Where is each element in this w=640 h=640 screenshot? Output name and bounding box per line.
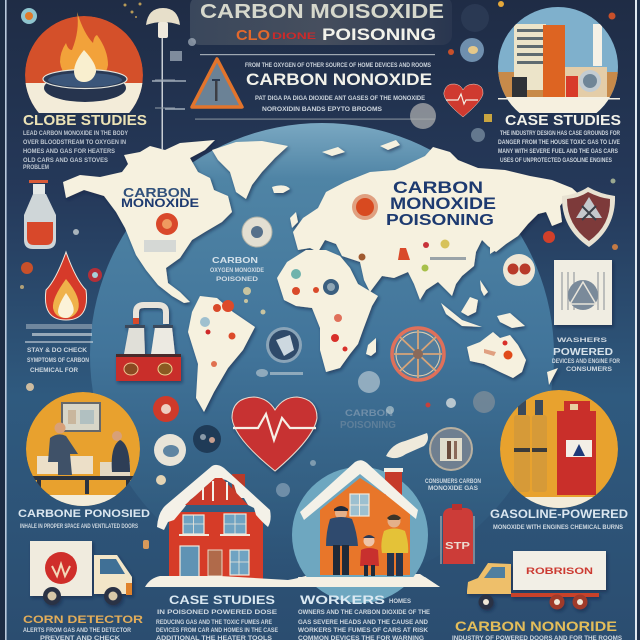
map label: carbon monoxide poisoning right: CARBON [393,178,483,197]
icon: box truck [467,551,606,610]
paragraph: LEAD CARBON MONOXIDE IN THE BODY [23,130,129,137]
icon: factory [116,305,181,381]
house walls [169,512,263,580]
world map [63,140,583,412]
lamp probe [146,8,180,150]
Eurasia [293,147,583,300]
icon: delivery truck [30,541,132,605]
icon: small top-left badge [21,8,37,24]
text block: powered: POWERED [553,346,613,358]
text block: left stripes: SYMPTOMS OF CARBON [27,357,89,364]
title line 2: CLO [236,27,270,44]
map label: center: CARBON [212,256,258,265]
faded circles and label in map [340,371,495,431]
icon: gas cans [500,390,618,512]
subtitle panel: NOROXIDIN BANDS EPYTO BROOMS [262,106,383,113]
Indonesia and Philippines [441,280,525,328]
text block: powered: WASHERS [557,337,608,344]
father [326,506,358,575]
heading: WORKERS [300,593,385,607]
icon: gold and gray dots [471,114,492,142]
paragraph: OVER BLOODSTREAM TO OXYGEN IN [23,139,126,146]
South America [188,296,255,412]
paragraph: WORKERS THE FUMES OF CARS AT RISK [298,627,428,634]
icon: red bottle [24,180,56,249]
map markers [144,194,512,367]
icon: globe medallion [266,327,302,363]
panel: red house [145,465,440,587]
map label: carbon monoxide left: CARBON [123,185,191,200]
icon: compass badge [242,217,272,247]
heading: corn detector: CORN DETECTOR [23,614,143,626]
Australia [467,332,526,378]
text block: medallion caption: CONSUMERS CARBON [425,478,481,485]
panel: carbon poisoned [18,392,150,530]
panel: corn detector [23,541,143,640]
caption: INHALE IN PROPER SPACE AND VENTILATED DOORS [20,523,138,530]
icon: grey texture dot [410,103,436,129]
icon: left small markers [20,229,102,391]
icon: gas cylinder [441,504,474,564]
text block: medallion caption [425,478,481,492]
map label: center: POISONED [216,276,258,283]
caption: MONOXIDE WITH ENGINES CHEMICAL BURNS [493,524,624,531]
icon: sparks top [124,2,142,18]
icon: small star markers [243,287,266,314]
British Isles [290,212,298,228]
paragraph: PROBLEM [23,164,49,171]
faded circles and label in map: POISONING [340,420,396,431]
panel: globe studies [23,12,147,171]
paragraph [298,609,431,640]
mother [381,514,408,576]
child [360,535,379,576]
panel: carbon nonoride [452,551,623,640]
heading: carbone ponosied: CARBONE PONOSIED [18,508,150,520]
icon: mask disk [503,254,535,286]
paragraph: OLD CARS AND GAS STOVES [23,157,109,164]
icon: small gauges centre-left [152,38,196,110]
North America [63,140,232,303]
icon: red badge [153,396,179,422]
icon: buildings in circle [498,7,618,113]
paragraph: HOMES AND GAS FOR HEATERS [23,148,116,155]
paragraph [23,627,131,640]
text block: powered: DEVICES AND ENGINE FOR [552,358,620,365]
title line 2: POISONING [322,25,436,44]
icon: right red splat [543,178,618,250]
ground line [498,98,620,100]
panel: orange house with family [292,460,440,603]
paragraph: OWNERS AND THE CARBON DIOXIDE OF THE [298,609,431,616]
icon: medical badges [154,425,316,497]
Iceland and Arctic isles [272,140,404,193]
chimney [232,474,245,498]
map label: center [210,256,265,283]
subtitle panel: FROM THE OXYGEN OF OTHER SOURCE OF HOME DEVICES AND ROOMS [245,62,432,69]
icon: heart [444,84,483,117]
panel: workers [298,593,431,640]
panel: case studies bottom [156,593,279,640]
icon: faded pill [256,369,303,377]
Africa [277,250,378,372]
chimney [384,468,403,495]
heading: carbon nonoride: CARBON NONORIDE [455,618,617,634]
subtitle heading: CARBON NONOXIDE [246,70,432,89]
globe [90,123,554,587]
heading: CASE STUDIES [169,593,275,607]
title line 2 [236,25,436,44]
snowy roof [157,465,271,530]
Greenland [212,141,288,199]
paragraph: DEVICES FROM CAR AND HOMES IN THE CASE [156,627,279,634]
icon: box truck: ROBRISON [526,566,593,577]
icon: moon planet [448,1,616,62]
panel: gasoline-powered [490,390,628,531]
paragraph [156,609,279,640]
caption tag: HOMES [389,598,412,605]
icon: shield [562,187,615,247]
paragraph: GAS SEVERE HEADS AND THE CAUSE AND [298,619,428,626]
backdrop circle [292,467,428,603]
icon: framed medallion [430,428,472,470]
title line 2: DIONE [272,31,316,41]
icon: smoke cloud [386,433,428,458]
map label: center: OXYGEN MONOXIDE [210,267,265,274]
icon: wheel valve [392,328,444,380]
paragraph: IN POISONED POWERED DOSE [157,609,278,616]
title plate [190,0,452,45]
map label: carbon monoxide left [121,185,199,210]
text block: left stripes: CHEMICAL FOR [30,367,78,374]
paragraph: ALERTS FROM GAS AND THE DETECTOR [23,627,131,634]
title line 1: CARBON MOISOXIDE [200,1,444,23]
window [350,494,369,516]
icon: warning triangle [192,59,242,107]
icon: seated people [26,392,140,510]
Madagascar [366,338,376,356]
icon: flame in bowl [25,12,143,113]
heading: gasoline-powered: GASOLINE-POWERED [490,509,628,521]
heading: case studies: CASE STUDIES [505,113,621,129]
paragraph [23,130,129,171]
subtitle panel: PAT DIGA PA DIGA DIOXIDE ANT GASES OF THE MONOXIDE [255,95,426,102]
door [180,546,199,578]
heading: clobe studies: CLOBE STUDIES [23,112,147,129]
map label: carbon monoxide poisoning right: MONOXIDE [390,194,496,213]
windows [183,514,249,575]
icon: flame drop [45,252,87,320]
map label: carbon monoxide poisoning right [386,178,496,229]
map label: carbon monoxide left: MONOXIDE [121,196,199,210]
ground snow [145,574,440,587]
text block: left stripes: STAY & DO CHECK [27,347,87,354]
text block: powered [552,337,620,373]
New Zealand [547,368,558,385]
panel: case studies [498,7,621,164]
text block: left stripes [25,324,93,374]
icon: small orange tag [143,540,149,549]
icon: gas cylinder: STP [445,541,470,552]
house wall [320,478,410,575]
text block: powered: CONSUMERS [566,366,613,373]
subtitle panel [195,54,435,120]
icon: vent panel [554,260,612,325]
paragraph [498,130,621,164]
Japan [490,226,512,254]
paragraph: REDUCING GAS AND THE TOXIC FUMES ARE [156,619,273,626]
text block: medallion caption: MONOXIDE GAS [428,485,479,492]
faded circles and label in map: CARBON [345,408,393,418]
people [326,506,408,576]
icon: heart monitor [232,397,317,471]
ground [298,577,440,587]
map label: carbon monoxide poisoning right: POISONING [386,212,494,229]
snowy roof [300,460,418,520]
